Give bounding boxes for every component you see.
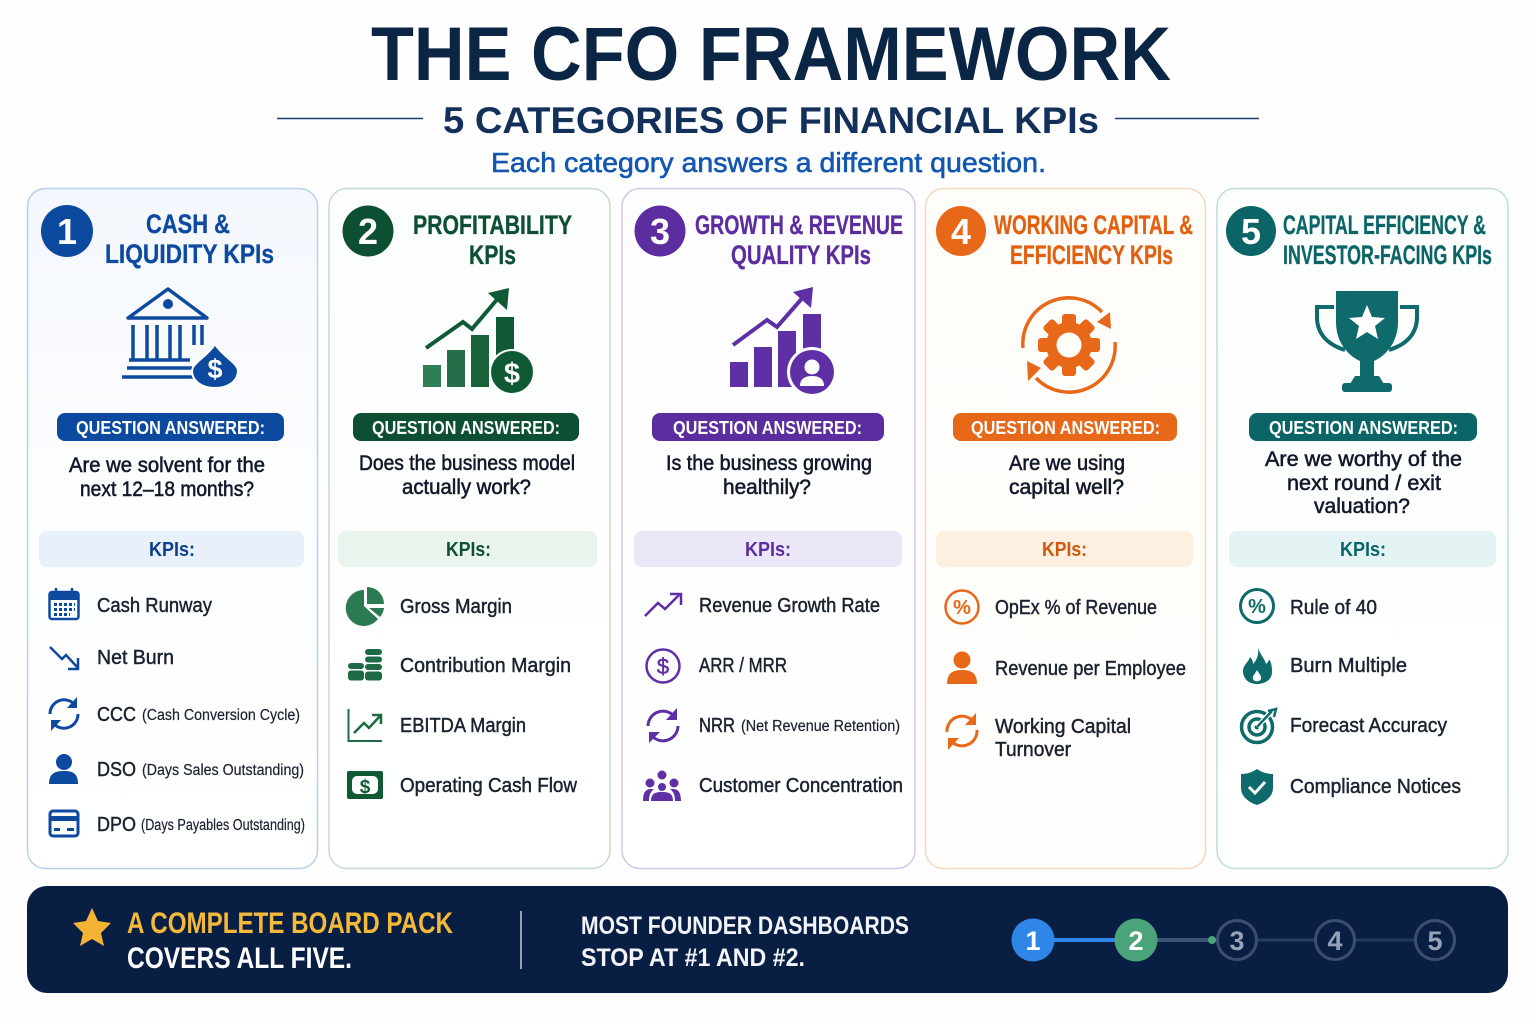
question text: actually work? (402, 476, 531, 499)
badge 3: 3 (650, 211, 670, 252)
KPI: revenue per employee: Revenue per Employee (995, 658, 1186, 680)
callout: founder dashboards (581, 912, 909, 972)
KPIs header (634, 531, 902, 567)
KPI: opex: % (953, 597, 971, 619)
badge 3 (634, 206, 686, 256)
step 3: 3 (1229, 926, 1245, 956)
KPI: customer concentration (643, 770, 903, 801)
callout: founder dashboards: STOP AT #1 AND #2. (581, 944, 805, 972)
question text: valuation? (1314, 495, 1410, 518)
KPI: gross margin (346, 587, 512, 626)
icon: bar chart with coin: $ (504, 358, 520, 390)
KPI: operating cash flow (347, 771, 578, 799)
heading (105, 209, 274, 269)
heading: LIQUIDITY KPIs (105, 239, 274, 269)
KPI: CCC (50, 697, 300, 731)
heading: EFFICIENCY KPIs (1010, 240, 1173, 270)
panel: profitability (329, 188, 610, 868)
badge 5: 5 (1241, 211, 1261, 252)
KPI: gross margin: Gross Margin (400, 596, 512, 618)
question text (359, 452, 575, 499)
step 1: 1 (1025, 926, 1041, 956)
KPI: burn multiple (1243, 648, 1407, 684)
question pill: QUESTION ANSWERED: (971, 418, 1160, 438)
question pill (353, 413, 579, 441)
question text: capital well? (1009, 476, 1124, 499)
KPI: EBITDA margin: EBITDA Margin (400, 715, 526, 737)
badge 1: 1 (57, 211, 77, 252)
heading: KPIs (469, 240, 516, 270)
KPIs header (338, 531, 597, 567)
KPI: ARR / MRR (646, 650, 787, 682)
KPIs header: KPIs: (149, 539, 195, 561)
KPI: cash runway: Cash Runway (97, 595, 212, 617)
heading: CASH & (146, 209, 230, 239)
heading (994, 210, 1193, 270)
KPI: revenue growth rate: Revenue Growth Rate (699, 595, 880, 617)
KPI: contribution margin: Contribution Margin (400, 655, 571, 677)
heading: PROFITABILITY (413, 210, 572, 240)
heading (413, 210, 572, 270)
step 2: 2 (1128, 926, 1144, 956)
KPI: revenue per employee (947, 652, 1186, 684)
badge 2: 2 (358, 211, 378, 252)
callout: founder dashboards: MOST FOUNDER DASHBOARDS (581, 912, 909, 940)
question text: Are we worthy of the (1265, 448, 1462, 471)
KPI: burn multiple: Burn Multiple (1290, 655, 1407, 677)
KPI: contribution margin (348, 649, 571, 680)
KPI: operating cash flow: Operating Cash Flow (400, 775, 578, 797)
KPI: NRR: NRR (699, 715, 735, 737)
KPI: compliance notices (1241, 769, 1461, 805)
KPI: customer concentration: Customer Concentration (699, 775, 903, 797)
KPI: CCC: CCC (97, 704, 136, 726)
step 4: 4 (1327, 926, 1343, 956)
KPI: NRR (648, 708, 900, 743)
question text (1009, 452, 1125, 499)
KPI: revenue growth rate (645, 594, 880, 617)
badge 1 (41, 205, 93, 257)
heading: GROWTH & REVENUE (695, 210, 903, 240)
KPIs header (936, 531, 1193, 567)
KPI: ARR / MRR: ARR / MRR (699, 655, 787, 677)
KPI: compliance notices: Compliance Notices (1290, 776, 1461, 798)
step 5: 5 (1427, 926, 1443, 956)
step 5 (1416, 920, 1454, 960)
step 1 (1012, 918, 1054, 962)
badge 4: 4 (951, 211, 971, 252)
icon: trophy (1317, 291, 1417, 392)
KPI: DSO: DSO (97, 759, 136, 781)
callout: board pack: COVERS ALL FIVE. (127, 942, 352, 975)
subtitle: 5 CATEGORIES OF FINANCIAL KPIs (443, 100, 1099, 141)
KPI: working capital turnover (947, 713, 1131, 761)
question text (1265, 448, 1462, 518)
question pill: QUESTION ANSWERED: (673, 418, 862, 438)
KPI: CCC: (Cash Conversion Cycle) (142, 707, 300, 724)
question pill: QUESTION ANSWERED: (1269, 418, 1458, 438)
icon: gear with cycle arrows (1023, 298, 1115, 392)
KPI: rule of 40: Rule of 40 (1290, 597, 1377, 619)
panel: capital efficiency and investor-facing (1217, 188, 1508, 868)
badge 4 (936, 206, 986, 256)
question text: Are we using (1009, 452, 1125, 475)
icon: bank with money drop: $ (207, 354, 223, 384)
callout: board pack: A COMPLETE BOARD PACK (127, 907, 453, 940)
panel: working capital and efficiency (926, 188, 1206, 868)
step 4 (1316, 920, 1354, 960)
KPI: forecast accuracy (1242, 709, 1447, 742)
question text: next 12–18 months? (80, 478, 254, 501)
KPIs header: KPIs: (1042, 539, 1087, 561)
heading (695, 210, 903, 270)
KPI: rule of 40: % (1248, 596, 1266, 618)
icon: bar chart with coin (423, 288, 535, 395)
question pill (652, 413, 884, 441)
heading: WORKING CAPITAL & (994, 210, 1193, 240)
KPIs header: KPIs: (1340, 539, 1386, 561)
icon: star (73, 908, 111, 946)
KPI: DPO (50, 811, 305, 836)
badge 2 (342, 206, 394, 256)
KPI: DSO: (Days Sales Outstanding) (142, 762, 304, 779)
question pill (57, 413, 284, 441)
KPI: working capital turnover: Working Capital (995, 716, 1131, 738)
question text: Are we solvent for the (69, 454, 265, 477)
KPIs header (1229, 531, 1496, 567)
KPI: opex (946, 590, 1157, 624)
KPI: DPO: DPO (97, 814, 136, 836)
question pill: QUESTION ANSWERED: (372, 418, 560, 438)
question text (666, 452, 872, 499)
heading (1283, 210, 1492, 270)
question text (69, 454, 265, 501)
heading: QUALITY KPIs (731, 240, 871, 270)
KPI: working capital turnover: Turnover (995, 739, 1071, 761)
KPI: EBITDA margin (348, 709, 526, 741)
footer banner (27, 886, 1508, 993)
KPIs header: KPIs: (745, 539, 791, 561)
callout: board pack (127, 907, 453, 975)
KPIs header: KPIs: (446, 539, 491, 561)
KPI: DPO: (Days Payables Outstanding) (141, 817, 305, 834)
KPI: ARR / MRR: $ (657, 654, 669, 679)
KPI: cash runway (49, 588, 212, 619)
KPI: DSO (49, 754, 304, 784)
question text: healthily? (723, 476, 811, 499)
tagline: Each category answers a different question. (491, 147, 1046, 178)
question pill (953, 413, 1177, 441)
question text: Does the business model (359, 452, 575, 475)
KPI: opex: OpEx % of Revenue (995, 597, 1157, 619)
KPI: operating cash flow: $ (360, 777, 371, 798)
KPI: net burn (50, 647, 174, 669)
question pill (1249, 413, 1477, 441)
KPIs header (39, 531, 304, 567)
question text: next round / exit (1287, 472, 1441, 495)
step 2 (1114, 918, 1158, 962)
panel: growth and revenue quality (622, 188, 915, 868)
question pill: QUESTION ANSWERED: (76, 418, 265, 438)
title: THE CFO FRAMEWORK (371, 12, 1171, 97)
panel: cash and liquidity (28, 188, 318, 868)
KPI: forecast accuracy: Forecast Accuracy (1290, 715, 1447, 737)
KPI: NRR: (Net Revenue Retention) (741, 718, 900, 735)
badge 5 (1226, 206, 1276, 256)
step 3 (1218, 920, 1256, 960)
KPI: net burn: Net Burn (97, 647, 174, 669)
icon: growth chart with person (730, 287, 837, 397)
icon: bank with money drop (122, 289, 238, 388)
question text: Is the business growing (666, 452, 872, 475)
progress tracker (1012, 918, 1454, 962)
KPI: rule of 40 (1240, 590, 1377, 622)
